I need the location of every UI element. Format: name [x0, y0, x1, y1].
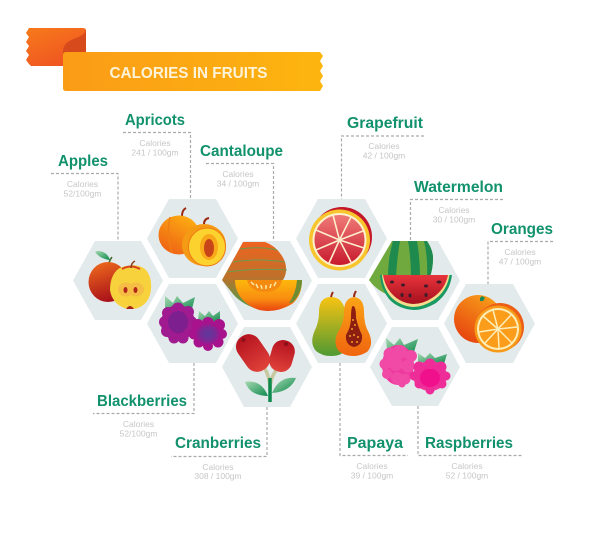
label: Raspberries: 52 / 100gm	[446, 470, 488, 480]
ribbon banner	[63, 52, 323, 91]
label: Raspberries: Raspberries	[425, 435, 513, 452]
label: Grapefruit: Calories	[368, 141, 400, 151]
label: Cranberries: 308 / 100gm	[194, 471, 242, 481]
label: Cranberries: Calories	[202, 462, 234, 472]
label: Watermelon	[414, 179, 503, 224]
label: Cantaloupe: Calories	[222, 169, 254, 179]
label: Papaya: Calories	[356, 461, 388, 471]
label: Cranberries: Cranberries	[175, 435, 261, 452]
icon: blackberries	[159, 296, 227, 351]
label: Grapefruit: Grapefruit	[347, 115, 424, 132]
title ribbon	[26, 28, 323, 91]
label: Cantaloupe: Cantaloupe	[200, 143, 283, 160]
label: Cantaloupe: 34 / 100gm	[217, 178, 259, 188]
label: Apples: Apples	[58, 153, 108, 170]
icon: grapefruit	[309, 207, 372, 270]
label: Cantaloupe	[200, 143, 283, 188]
label: Watermelon: Calories	[438, 205, 470, 215]
icon: oranges	[454, 295, 524, 352]
label: Raspberries	[425, 435, 513, 480]
label: Grapefruit: 42 / 100gm	[363, 150, 405, 160]
label: Blackberries: Blackberries	[97, 393, 187, 410]
icon: raspberries	[380, 338, 450, 394]
icon: watermelon	[369, 241, 452, 310]
icon: apricots	[158, 208, 226, 266]
label: Papaya	[347, 435, 403, 480]
label: Apples: 52/100gm	[64, 188, 101, 198]
label: Oranges: Calories	[504, 247, 536, 257]
label: Apples	[58, 153, 108, 198]
label: Oranges: 47 / 100gm	[499, 256, 541, 266]
label: Papaya: 39 / 100gm	[351, 470, 393, 480]
label: Apricots: Apricots	[125, 112, 185, 129]
icon: apples	[88, 251, 151, 309]
label: Blackberries: 52/100gm	[120, 428, 157, 438]
label: Apricots: Calories	[139, 138, 171, 148]
ribbon back fold	[26, 28, 86, 66]
icon: cranberries	[231, 329, 297, 402]
label: Blackberries	[97, 393, 187, 438]
label: Grapefruit	[347, 115, 424, 160]
label: Apricots: 241 / 100gm	[131, 148, 179, 158]
label: Blackberries: Calories	[123, 419, 154, 429]
label: Watermelon: 30 / 100gm	[433, 214, 475, 224]
title: CALORIES IN FRUITS	[110, 65, 268, 82]
label: Apricots	[125, 112, 185, 158]
label: Papaya: Papaya	[347, 435, 403, 452]
label: Oranges: Oranges	[491, 221, 553, 238]
label: Raspberries: Calories	[451, 461, 483, 471]
label: Oranges	[491, 221, 553, 266]
icon: cantaloupe	[222, 242, 302, 311]
label: Apples: Calories	[67, 179, 98, 189]
icon: papaya	[312, 291, 371, 356]
connector lines	[51, 132, 553, 456]
label: Watermelon: Watermelon	[414, 179, 503, 196]
label: Cranberries	[175, 435, 261, 481]
hexagon tiles	[73, 199, 535, 407]
